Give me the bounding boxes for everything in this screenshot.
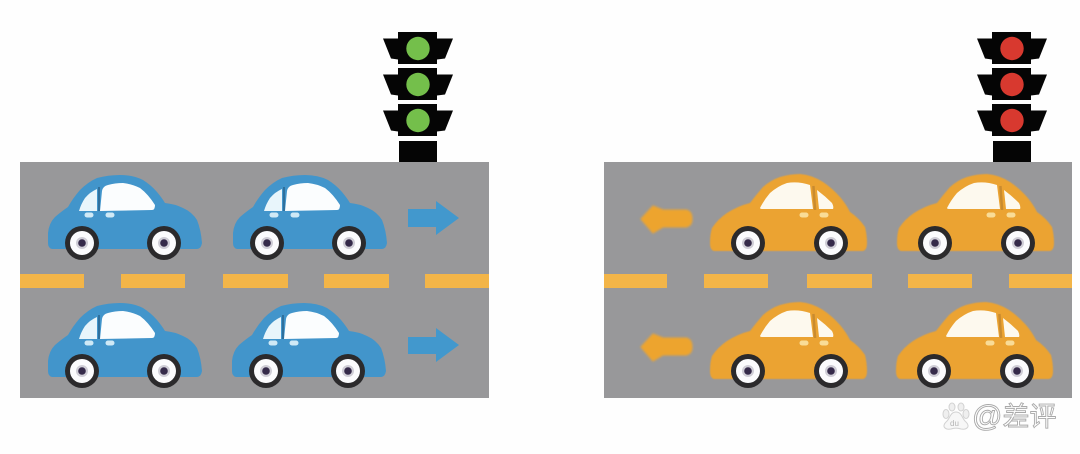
panel: red light traffic backing up: [604, 32, 1072, 398]
car: blue bottom right: [232, 303, 386, 388]
traffic light: red: [977, 32, 1047, 162]
arrow: blue bottom: [408, 328, 459, 362]
car: blue top right: [233, 175, 387, 260]
road: left: [20, 162, 489, 398]
car: orange bottom right: [896, 302, 1053, 388]
road: right: [604, 162, 1072, 398]
watermark: [943, 400, 1056, 433]
car: blue bottom left: [48, 303, 202, 388]
arrow: blue top: [408, 201, 459, 235]
watermark text: @差评: [972, 400, 1056, 433]
arrow: orange top: [641, 206, 692, 233]
car: blue top left: [48, 175, 202, 260]
car: orange bottom left: [710, 302, 867, 388]
arrow: orange bottom: [641, 334, 692, 361]
traffic light: green: [383, 32, 453, 162]
car: orange top right: [897, 174, 1054, 260]
car: orange top left: [710, 174, 867, 260]
icon: baidu paw: du: [950, 419, 959, 428]
panel: green light traffic flowing: [20, 32, 489, 398]
